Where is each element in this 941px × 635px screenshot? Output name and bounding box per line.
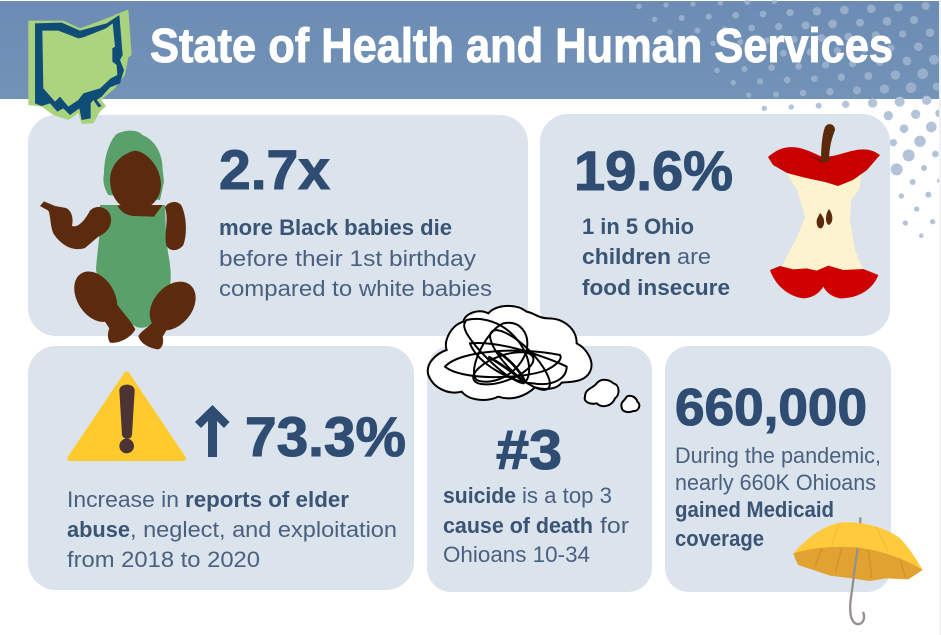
- text block: infant mortality: [219, 215, 492, 301]
- stat: 2.7x: 2.7x: [219, 138, 330, 201]
- text block: Medicaid: [675, 443, 881, 551]
- text block: elder abuse: abuse: [67, 517, 130, 542]
- panel: suicide: [427, 346, 652, 592]
- text block: food insecurity: are: [677, 244, 711, 269]
- text block: suicide: cause of death: [443, 513, 593, 538]
- panel: infant mortality: [28, 115, 528, 336]
- text block: elder abuse: [67, 487, 397, 572]
- text block: suicide: Ohioans 10-34: [443, 542, 590, 567]
- icon: thought cloud: [428, 306, 639, 412]
- text block: Medicaid: During the pandemic,: [675, 443, 881, 468]
- text block: elder abuse: , neglect, and exploitation: [130, 517, 397, 542]
- stat: 19.6%: 19.6%: [574, 139, 733, 202]
- text block: suicide: suicide: [443, 483, 516, 508]
- icon: up arrow: [195, 405, 230, 457]
- text block: food insecurity: 1 in 5 Ohio: [582, 214, 694, 239]
- text block: food insecurity: children: [582, 244, 671, 269]
- stat: 660,000: 660,000: [675, 379, 867, 437]
- text block: Medicaid: nearly 660K Ohioans: [675, 470, 876, 495]
- page right edge: [939, 0, 941, 635]
- header banner: [0, 1, 939, 99]
- text block: food insecurity: food insecure: [582, 275, 730, 300]
- panel: food insecurity: [540, 114, 890, 336]
- text block: infant mortality: more Black babies die: [219, 215, 452, 240]
- text block: food insecurity: [582, 214, 730, 300]
- icon: apple core: [768, 124, 880, 298]
- text block: elder abuse: Increase in: [67, 487, 179, 512]
- stat: #3: #3: [496, 418, 562, 481]
- text block: infant mortality: before their 1st birthday: [219, 246, 476, 271]
- icon: Ohio state: [28, 9, 132, 124]
- text block: suicide: is a top 3: [522, 483, 612, 508]
- text block: Medicaid: gained Medicaid: [675, 497, 834, 522]
- text block: suicide: [443, 483, 629, 567]
- icon: baby: [40, 131, 205, 349]
- panel: Medicaid: [665, 346, 891, 592]
- text block: elder abuse: reports of elder: [185, 487, 349, 512]
- icon: warning triangle: [70, 374, 183, 458]
- icon: umbrella: [793, 518, 923, 624]
- text block: infant mortality: compared to white babies: [219, 276, 492, 301]
- dot pattern: [636, 0, 941, 238]
- text block: Medicaid: coverage: [675, 526, 764, 551]
- text block: elder abuse: from 2018 to 2020: [67, 547, 260, 572]
- text block: suicide: for: [600, 513, 629, 538]
- stat: 73.3%: 73.3%: [245, 405, 406, 468]
- panel: elder abuse: [28, 346, 414, 590]
